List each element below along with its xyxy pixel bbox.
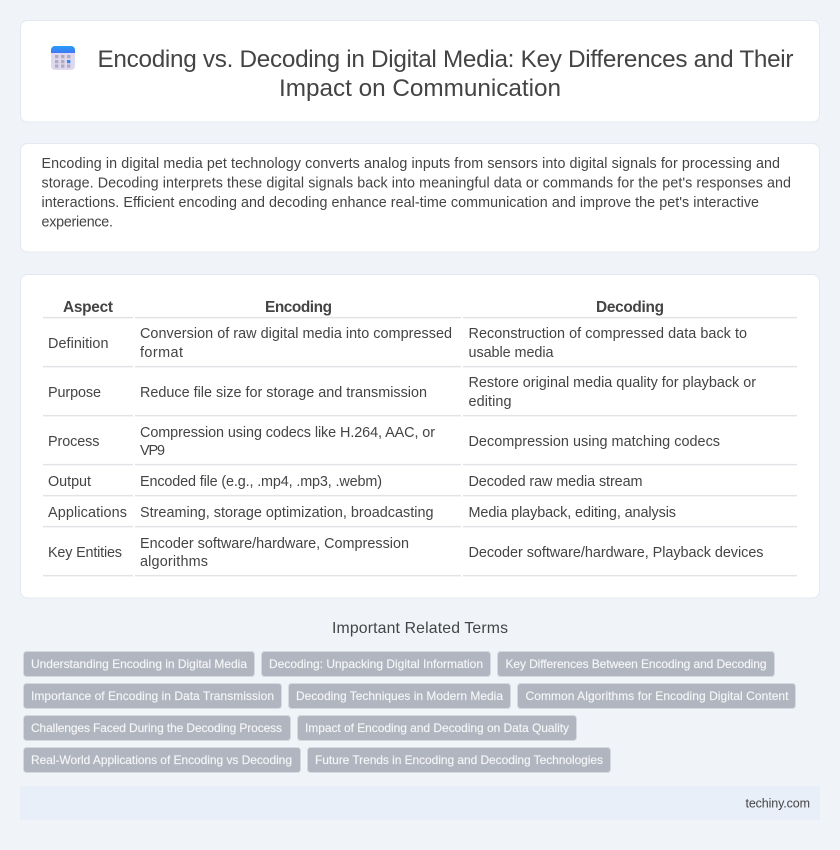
table header	[63, 299, 664, 316]
related term tags: Key Differences Between Encoding and Decoding	[506, 657, 766, 671]
row: purpose: Reduce file size for storage and transmission	[140, 385, 427, 401]
row: applications: Media playback, editing, analysis	[468, 505, 676, 521]
related term tags: Decoding: Unpacking Digital Information	[269, 657, 483, 671]
row: process: Decompression using matching codecs	[468, 434, 720, 450]
footer: techiny.com	[746, 796, 810, 810]
panel: intro paragraph: experience.	[42, 214, 113, 230]
related term tags: Understanding Encoding in Digital Media	[31, 657, 247, 671]
related term tags: Impact of Encoding and Decoding on Data Quality	[305, 721, 569, 735]
footer	[20, 786, 820, 820]
panel: intro paragraph: interactions. Efficient encoding and decoding enhance real-time communication and improve the pet's interactive	[42, 195, 759, 211]
title: Impact on Communication	[279, 75, 561, 102]
panel: intro paragraph: Encoding in digital media pet technology converts analog inputs from sensors into digital signals for processing and	[42, 156, 780, 172]
row: process: VP9	[140, 443, 165, 459]
row: process: Process	[48, 434, 100, 450]
related term tags: Challenges Faced During the Decoding Process	[31, 721, 282, 735]
related term tags: Common Algorithms for Encoding Digital Content	[526, 689, 789, 703]
row: key entities: Decoder software/hardware, Playback devices	[468, 545, 764, 561]
icon: calendar	[51, 46, 75, 70]
panel: intro paragraph	[20, 144, 820, 252]
row: definition: Conversion of raw digital media into compressed	[140, 326, 452, 342]
row: output: Decoded raw media stream	[468, 474, 642, 490]
row: output: Encoded file (e.g., .mp4, .mp3, .webm)	[140, 474, 382, 490]
title: Encoding vs. Decoding in Digital Media: Key Differences and Their	[98, 46, 794, 73]
row: purpose	[48, 375, 756, 410]
row: definition: usable media	[468, 345, 554, 361]
panel: intro paragraph: storage. Decoding interprets these digital signals back into meaningful data or commands for the pet's responses and	[42, 176, 791, 192]
row: purpose: editing	[468, 394, 512, 410]
panel: comparison table	[20, 274, 820, 598]
related term tags: Decoding Techniques in Modern Media	[296, 689, 503, 703]
header panel	[20, 20, 820, 122]
related term tags: Future Trends in Encoding and Decoding Technologies	[315, 753, 603, 767]
row: definition: format	[140, 345, 183, 361]
row: key entities: algorithms	[140, 554, 208, 570]
row: purpose: Restore original media quality for playback or	[468, 375, 756, 391]
row: output: Output	[48, 474, 91, 490]
table header: Encoding	[265, 299, 332, 316]
row: applications: Applications	[48, 505, 127, 521]
row: output	[48, 474, 642, 490]
related term tags	[24, 652, 796, 772]
related term tags: Importance of Encoding in Data Transmission	[31, 689, 274, 703]
table header: Decoding	[596, 299, 664, 316]
row: applications	[48, 505, 676, 521]
related term tags: Real-World Applications of Encoding vs Decoding	[31, 753, 292, 767]
row: process	[48, 425, 720, 459]
title	[98, 46, 794, 102]
row: key entities: Key Entities	[48, 545, 122, 561]
row: key entities: Encoder software/hardware, Compression	[140, 536, 409, 552]
table header: Aspect	[63, 299, 113, 316]
row: key entities	[48, 536, 764, 570]
row: definition: Reconstruction of compressed data back to	[468, 326, 747, 342]
row: applications: Streaming, storage optimization, broadcasting	[140, 505, 434, 521]
row: purpose: Purpose	[48, 385, 101, 401]
row: definition: Definition	[48, 336, 108, 352]
heading: important related terms: Important Related Terms	[332, 620, 508, 637]
row: definition	[48, 326, 747, 361]
row: process: Compression using codecs like H.264, AAC, or	[140, 425, 435, 441]
